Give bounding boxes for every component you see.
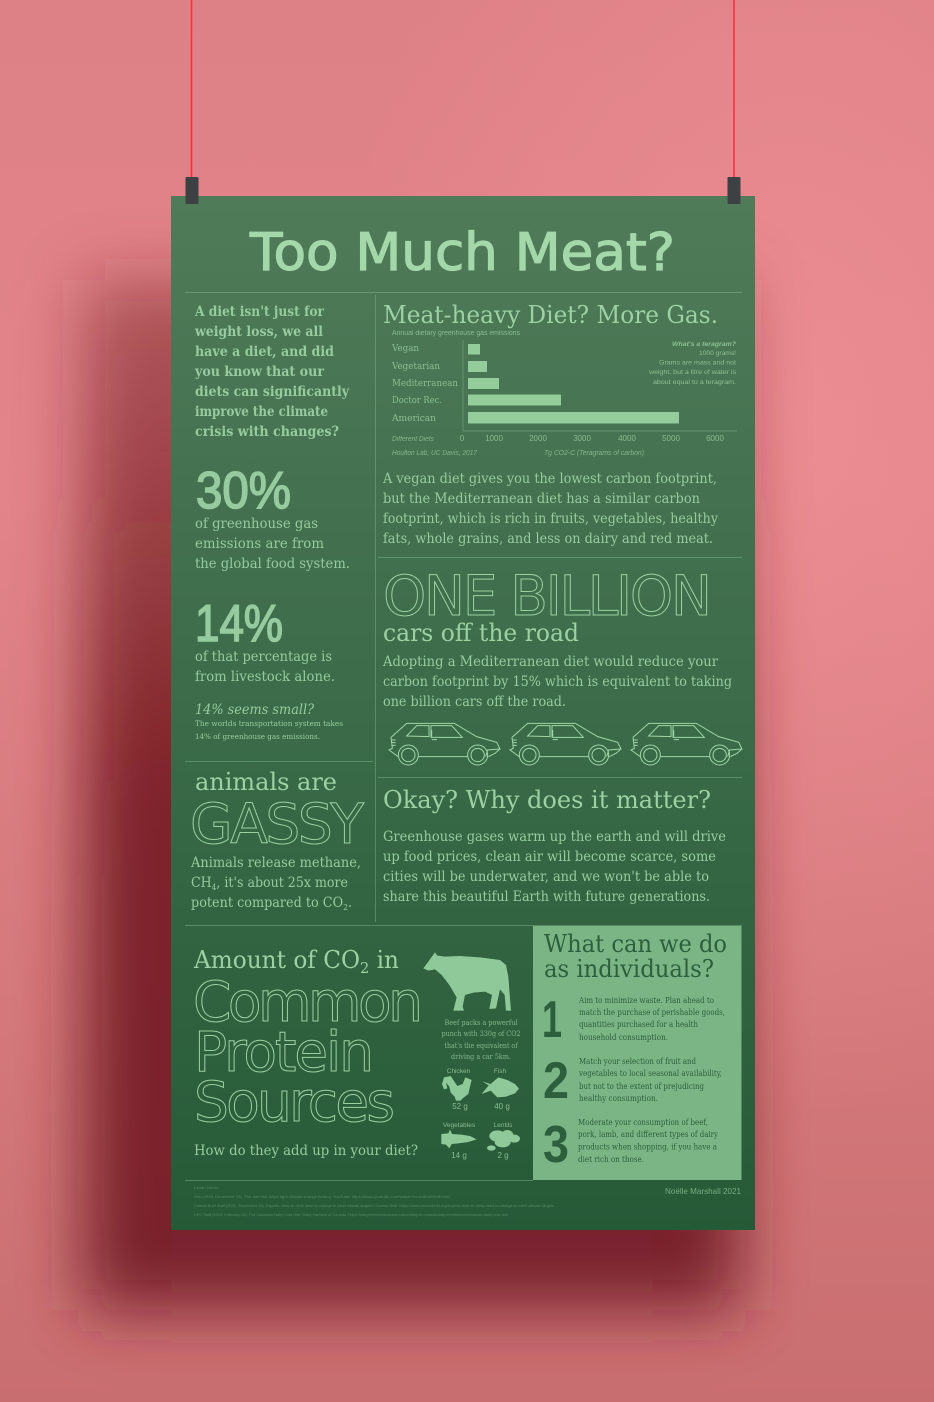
bar chart: 3000 [573,434,591,443]
stat: 30 percent: the global food system. [195,556,350,572]
footer: sources and credit: Noëlle Marshall 2021 [665,1186,741,1196]
panel: what can we do [533,926,742,1180]
panel: animals are gassy: , it's about 25x more [216,875,348,891]
bar chart: Houlton Lab, UC Davis, 2017 [392,450,478,457]
title: Too Much Meat? [249,223,675,283]
panel: introduction: diets can significantly [195,384,350,400]
text block: vegan diet: footprint, which is rich in fruits, vegetables, healthy [383,511,718,527]
panel: animals are gassy: potent compared to CO [191,895,351,911]
icon: lentils: Lentils [494,1122,513,1129]
bar chart: 0 [460,434,465,443]
bar chart: Doctor Rec. [392,395,442,406]
panel: animals are gassy: 4 [212,883,216,892]
step 1: Aim to minimize waste. Plan ahead to [578,996,714,1006]
panel: animals are gassy: CH [191,875,213,891]
step 1 [542,991,725,1049]
stat: 30 percent: of greenhouse gas [195,516,318,532]
bar chart: Different Diets [392,436,434,443]
hanging strings [192,0,734,178]
step 3: products when shopping, if you have a [578,1142,717,1152]
icon: fish: 40 g [494,1102,510,1111]
panel: meat-heavy diet chart [382,301,737,547]
icon: lentils [487,1122,520,1160]
bar chart [391,340,737,457]
bar chart: Vegetarian [391,361,440,372]
bar chart: Vegan [391,343,419,354]
icon: cow [423,952,511,1011]
note: what's a teragram: weight, but a litre of water is [648,369,737,376]
heading: individuals [544,930,727,983]
panel: introduction: crisis with changes? [195,424,339,440]
bar chart: 1000 [485,434,503,443]
note: what's a teragram: about equal to a teragram. [653,379,736,386]
bar chart: 5000 [662,434,680,443]
panel: common protein sources: Protein [194,1020,374,1084]
panel: why does it matter: Okay? Why does it matter? [383,786,711,814]
panel: common protein sources: How do they add up in your diet? [194,1143,418,1159]
panel: one billion cars: one billion cars off the road. [383,694,566,710]
panel: why does it matter: Greenhouse gases warm up the earth and will drive [383,829,726,845]
panel: common protein sources: 2 [360,959,369,977]
step 1: quantities purchased for a health [579,1020,698,1030]
bar chart: Tg CO2-C (Teragrams of carbon) [544,450,644,457]
panel: statistics [195,462,350,741]
icon: chicken [442,1068,472,1111]
note: transportation comparison [195,702,343,741]
icon: car 3 [631,723,742,765]
poster panel [171,196,755,1230]
text block: beef: Beef packs a powerful [444,1018,518,1027]
step 3: pork, lamb, and different types of dairy [578,1130,718,1140]
panel: common protein sources: Sources [194,1070,395,1134]
footer: sources and credit: Learn More: [194,1185,219,1190]
text block: vegan diet: fats, whole grains, and less on dairy and red meat. [383,531,713,547]
icon: vegetables: 14 g [451,1151,467,1160]
note: transportation comparison: 14% of greenhouse gas emissions. [195,732,320,741]
step 3: diet rich on those. [578,1155,644,1165]
stat: 14 percent: of that percentage is [195,649,332,665]
text block: beef: driving a car 5km. [451,1052,511,1061]
stat: 14 percent [195,595,335,685]
icon: fish [482,1068,519,1111]
heading: individuals: What can we do [544,930,727,958]
footer: sources and credit: Vox (2019, December 13). The diet that helps fight climate change [video]. YouTube. https://www.youtube.com/watch?v=nUdDWGMEHbU [194,1194,450,1199]
stat: 30 percent: 30% [196,462,291,520]
binder clips [186,177,740,204]
step 2: vegetables to local seasonal availability, [578,1069,722,1079]
panel: animals are gassy: animals are [195,768,337,796]
panel: introduction: you know that our [194,364,325,380]
text block: vegan diet: A vegan diet gives you the lowest carbon footprint, [382,471,717,487]
panel: introduction: have a diet, and did [195,344,335,360]
stat: 14 percent: 14% [195,595,283,653]
panel: one billion cars: Adopting a Mediterranean diet would reduce your [382,654,719,670]
note: what's a teragram: What's a teragram? [672,341,736,348]
panel: meat-heavy diet chart: Meat-heavy Diet? More Gas. [383,301,718,329]
note: transportation comparison: 14% seems small? [195,702,315,718]
panel: one billion cars [382,564,742,765]
icon: chicken: 52 g [452,1102,468,1111]
panel: one billion cars: ONE BILLION [383,564,712,628]
panel: common protein sources: in [369,946,399,974]
bar chart: Mediterranean [392,378,458,389]
panel: introduction: improve the climate [195,404,328,420]
step 2 [543,1052,722,1110]
panel: animals are gassy: Animals release methane, [190,855,361,871]
icon: car 2 [510,723,621,765]
panel: why does it matter: up food prices, clean air will become scarce, some [383,849,716,865]
panel: introduction: A diet isn't just for [194,304,325,320]
footer: sources and credit: Carbon Brief Staff (2020, September 18). Experts: How do diets need to change to meet climate targets? Carbon Brief. https://www.carbonbrief.org/experts-how-do-diets-need-to-change-to-meet-climate-targets [194,1203,554,1208]
bar chart: 2000 [529,434,547,443]
stat: 14 percent: from livestock alone. [195,669,335,685]
panel: introduction: weight loss, we all [194,324,323,340]
text block: vegan diet [382,471,718,547]
panel: animals are gassy [190,768,364,912]
heading: individuals: as individuals? [544,955,714,983]
panel: why does it matter: cities will be underwater, and we won't be able to [383,869,709,885]
panel: common protein sources [193,946,521,1160]
poster shadow [84,280,740,1310]
step 3: 3 [543,1116,569,1174]
step 2: but not to the extent of prejudicing [579,1082,704,1092]
icon: lentils: 2 g [497,1151,509,1160]
panel: introduction [194,304,350,440]
panel: one billion cars: carbon footprint by 15% which is equivalent to taking [383,674,732,690]
icon: vegetables [441,1122,477,1160]
stat: 30 percent [195,462,350,572]
footer: sources and credit [194,1185,741,1217]
note: what's a teragram: Grams are mass and not [659,360,736,366]
text block: vegan diet: but the Mediterranean diet has a similar carbon [383,491,700,507]
panel: common protein sources: Amount of CO [194,946,366,974]
panel: why does it matter: share this beautiful Earth with future generations. [383,889,710,905]
panel: animals are gassy: . [348,895,352,911]
text block: beef: punch with 330g of CO2 [442,1029,521,1038]
step 1: 1 [542,991,562,1049]
bar chart: American [391,413,436,424]
panel: animals are gassy: GASSY [190,792,364,856]
panel: animals are gassy: 2 [343,903,348,912]
icon: fish: Fish [494,1068,507,1075]
text block: beef: that's the equivalent of [444,1041,519,1050]
panel: meat-heavy diet chart: Annual dietary greenhouse gas emissions [392,330,520,337]
panel: common protein sources: Common [193,970,423,1034]
step 3 [543,1116,718,1174]
step 1: household consumption. [579,1033,668,1043]
note: what's a teragram: 1000 grams! [699,350,736,357]
step 2: healthy consumption. [579,1094,658,1104]
footer: sources and credit: DFC Staff (2019, February 14). The Canadian Dairy Cow Diet. Dairy Farmers of Canada. https://dairyfarmersofcanada.ca/en/dairy-in-canada/dairy-excellence/canadian-dairy-cow-diet [194,1212,509,1217]
step 2: Match your selection of fruit and [579,1057,696,1067]
step 3: Moderate your consumption of beef, [578,1118,708,1128]
bar chart: 6000 [706,434,724,443]
note: what's a teragram [648,341,737,386]
panel: one billion cars: cars off the road [383,619,579,647]
note: transportation comparison: The worlds transportation system takes [195,719,343,728]
text block: beef [442,1018,521,1061]
step 2: 2 [543,1052,569,1110]
icon: car 1 [389,723,500,765]
bar chart: 4000 [618,434,636,443]
step 1: match the purchase of perishable goods, [579,1008,725,1018]
stat: 30 percent: emissions are from [195,536,324,552]
icon: vegetables: Vegetables [443,1122,476,1129]
icon: chicken: Chicken [447,1068,471,1075]
panel: why does it matter [383,786,726,905]
